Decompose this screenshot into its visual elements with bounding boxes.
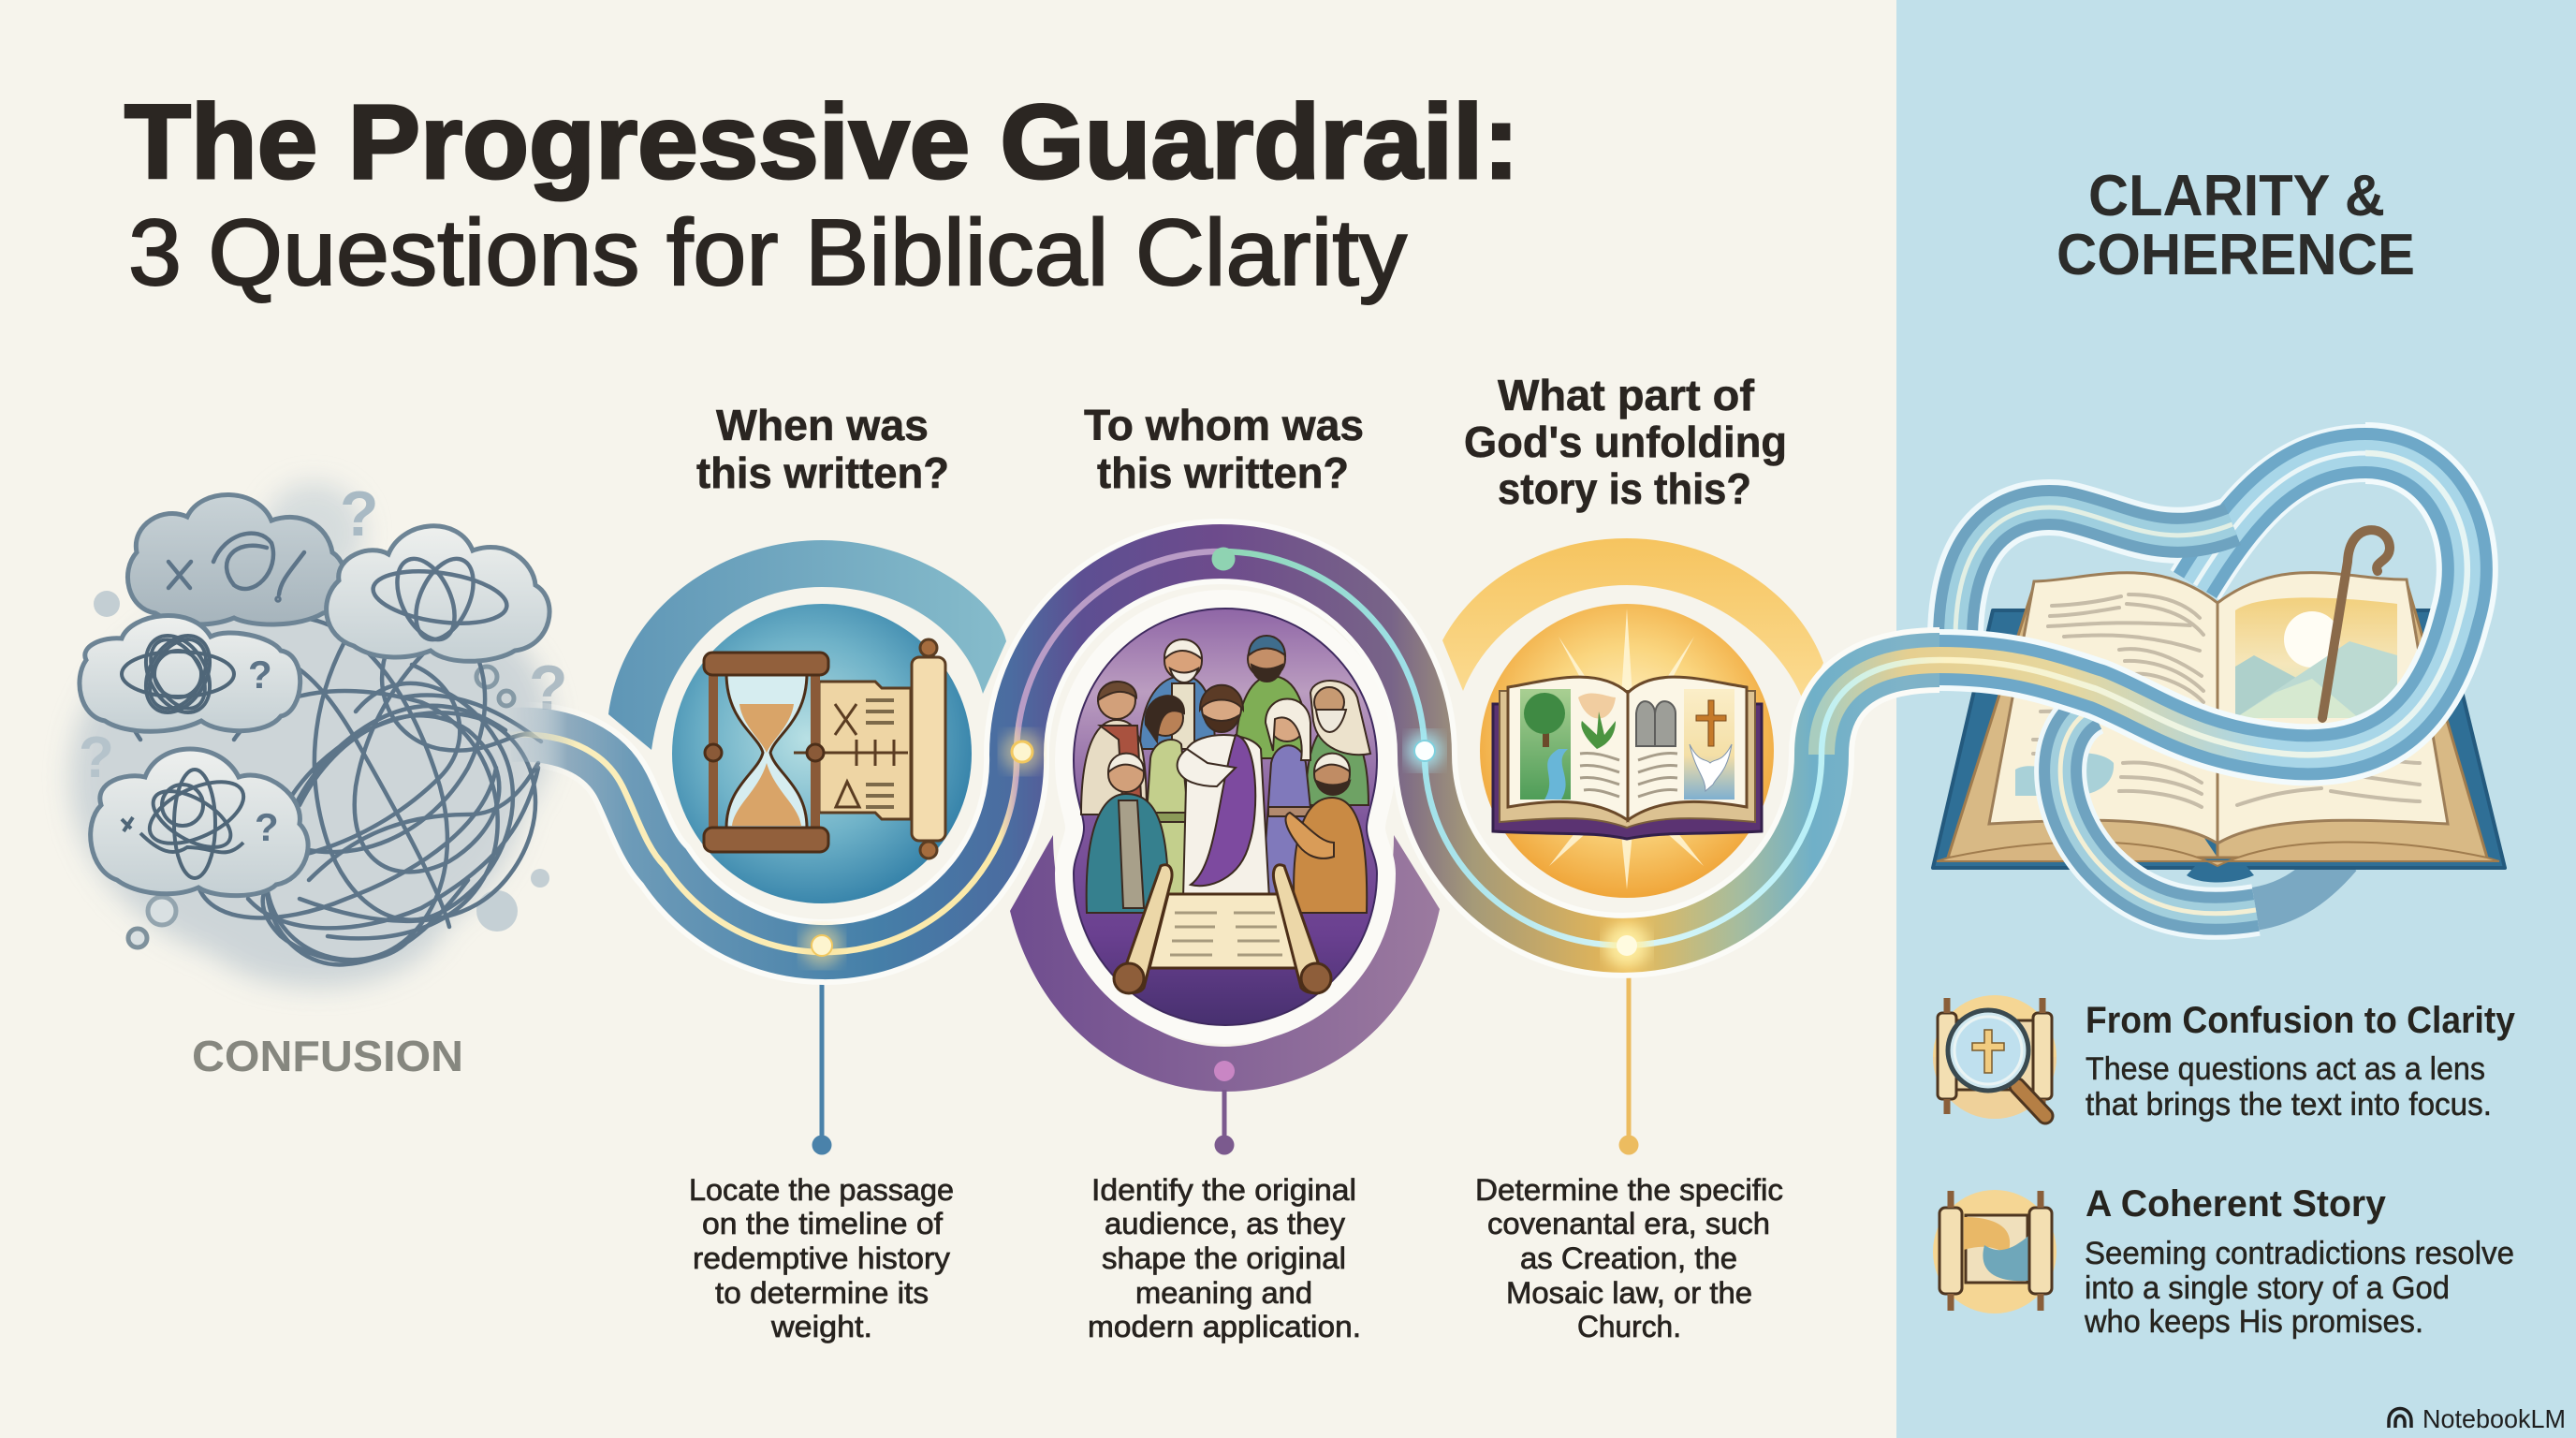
floating question marks: ? — [340, 478, 379, 550]
arc: purple ring lower part for question 2 — [1010, 835, 1440, 1092]
text: question 1 description — [689, 1173, 954, 1343]
circle: question 3 illustration — [1480, 604, 1774, 898]
text: question 1 description: to determine its — [715, 1276, 929, 1310]
person: man top right — [1236, 636, 1309, 758]
text: a coherent story: into a single story of a God — [2085, 1270, 2450, 1306]
heading: question 2 — [1084, 401, 1364, 497]
text: question 2 description: audience, as they — [1105, 1207, 1345, 1240]
illustration: large open book — [1933, 530, 2505, 882]
icon: stone tablets — [1636, 701, 1676, 746]
heading: question 3: God's unfolding — [1464, 418, 1787, 466]
panel: tree and river — [1520, 689, 1571, 800]
text: from confusion to clarity — [2086, 1000, 2516, 1123]
cloud: top left — [127, 494, 345, 624]
title: 3 Questions for Biblical Clarity — [128, 200, 1407, 305]
text lines on book — [2033, 594, 2420, 807]
book cover — [1933, 610, 2505, 868]
circle: question 2 illustration — [1074, 609, 1377, 1025]
grey haze behind clouds — [70, 482, 552, 988]
arc: blue ring above question 1 — [608, 540, 1006, 750]
text: a coherent story — [2084, 1183, 2514, 1340]
panel: clarity and coherence background — [1896, 0, 2576, 1438]
heading: question 3: story is this? — [1498, 464, 1751, 513]
panel: plant vignette — [1578, 694, 1616, 749]
text: question 1 description: Locate the passage — [689, 1173, 954, 1207]
text: a coherent story: A Coherent Story — [2086, 1183, 2387, 1225]
floating question marks: ? — [79, 726, 114, 790]
title — [124, 83, 1519, 305]
page illustration: sunrise — [2235, 597, 2397, 718]
text: question 3 description: as Creation, the — [1520, 1241, 1737, 1275]
text: question 1 description: weight. — [770, 1310, 872, 1343]
icon: scroll with magnifying glass — [1933, 995, 2056, 1119]
title: The Progressive Guardrail: — [124, 83, 1519, 200]
text: a coherent story: Seeming contradictions resolve — [2085, 1236, 2514, 1271]
node: glowing points on the ribbon — [801, 547, 1649, 1081]
heading: clarity and coherence: CLARITY & — [2088, 164, 2385, 228]
sun rays — [1512, 609, 1741, 889]
text: question 2 description: modern application. — [1088, 1310, 1361, 1343]
person: man right veil — [1306, 681, 1370, 805]
person: elder lower left — [1087, 754, 1168, 913]
cloud: bottom left: ? — [255, 805, 279, 849]
connector: question 3 — [1619, 974, 1638, 1155]
connector: question 1 — [812, 974, 831, 1155]
icon: open torah scroll — [1114, 865, 1331, 993]
left page — [1989, 573, 2217, 844]
heading: question 1: this written? — [696, 448, 949, 497]
icon: illustrated open book — [1493, 677, 1762, 839]
heading: question 3: What part of — [1498, 371, 1755, 419]
text: question 2 description: Identify the original — [1091, 1173, 1356, 1207]
text: question 2 description: shape the original — [1102, 1241, 1346, 1275]
icon: hourglass — [704, 653, 828, 852]
connector: question 2 — [1215, 1090, 1234, 1155]
decorative bubbles — [94, 591, 549, 947]
lower loop of clarity tube — [2060, 710, 2256, 914]
cloud: middle left — [80, 616, 300, 731]
text: question 1 description: on the timeline of — [702, 1207, 943, 1240]
person: man left — [1081, 682, 1147, 814]
heading: clarity and coherence — [2056, 164, 2415, 287]
cloud: middle left: ? — [248, 653, 272, 697]
cloud: top right — [327, 526, 549, 661]
logo: NotebookLM: NotebookLM — [2422, 1404, 2566, 1433]
cloud: bottom left — [91, 749, 308, 896]
person: elder top left — [1140, 639, 1215, 749]
text: question 3 description: Determine the specific — [1475, 1173, 1783, 1207]
person: woman right — [1262, 698, 1320, 899]
person: man lower right — [1286, 754, 1367, 913]
text: from confusion to clarity: From Confusion to Clarity — [2086, 1000, 2516, 1041]
faint cloud vignette on left page — [2015, 753, 2114, 796]
page text lines — [1580, 754, 1677, 797]
text: question 2 description: meaning and — [1135, 1276, 1312, 1310]
text: question 3 description: Mosaic law, or the — [1506, 1276, 1752, 1310]
text: from confusion to clarity: These questions act as a lens — [2086, 1051, 2485, 1087]
text: from confusion to clarity: that brings the text into focus. — [2086, 1087, 2492, 1123]
page block edges — [1948, 582, 2487, 858]
panel: clarity tubes behind the book — [1955, 453, 2365, 910]
shepherd staff — [2322, 530, 2390, 718]
panel: cross and dove — [1684, 689, 1734, 800]
text: a coherent story: who keeps His promises. — [2084, 1304, 2423, 1340]
right page — [2217, 573, 2448, 844]
heading: question 2: To whom was — [1084, 401, 1364, 449]
floating question marks — [79, 478, 568, 790]
path: progressive ribbon from confusion to clarity — [510, 453, 2467, 952]
tangled lines — [133, 609, 541, 964]
text: question 3 description: covenantal era, such — [1487, 1207, 1770, 1240]
heading: question 2: this written? — [1097, 448, 1349, 497]
heading: clarity and coherence: COHERENCE — [2056, 223, 2415, 287]
text: question 3 description — [1475, 1173, 1783, 1343]
people group — [1081, 636, 1370, 913]
text: question 1 description: redemptive history — [693, 1241, 950, 1275]
illustration: confusion cloud and tangle — [70, 478, 568, 988]
icon: scroll with merging swirl — [1933, 1190, 2056, 1313]
text: question 2 description — [1088, 1173, 1361, 1343]
circle: question 1 illustration — [672, 604, 972, 903]
person: central figure in white and purple — [1178, 685, 1269, 899]
heading: question 1 — [696, 401, 949, 497]
heading: question 3 — [1464, 371, 1787, 513]
icon: scroll with timeline — [794, 639, 945, 858]
person: woman left — [1141, 696, 1196, 899]
text: question 3 description: Church. — [1577, 1310, 1681, 1343]
heading: question 1: When was — [716, 401, 929, 449]
arc: gold ring above question 3 — [1442, 538, 1823, 702]
floating question marks: ? — [529, 653, 568, 724]
label: confusion: CONFUSION — [192, 1032, 463, 1080]
